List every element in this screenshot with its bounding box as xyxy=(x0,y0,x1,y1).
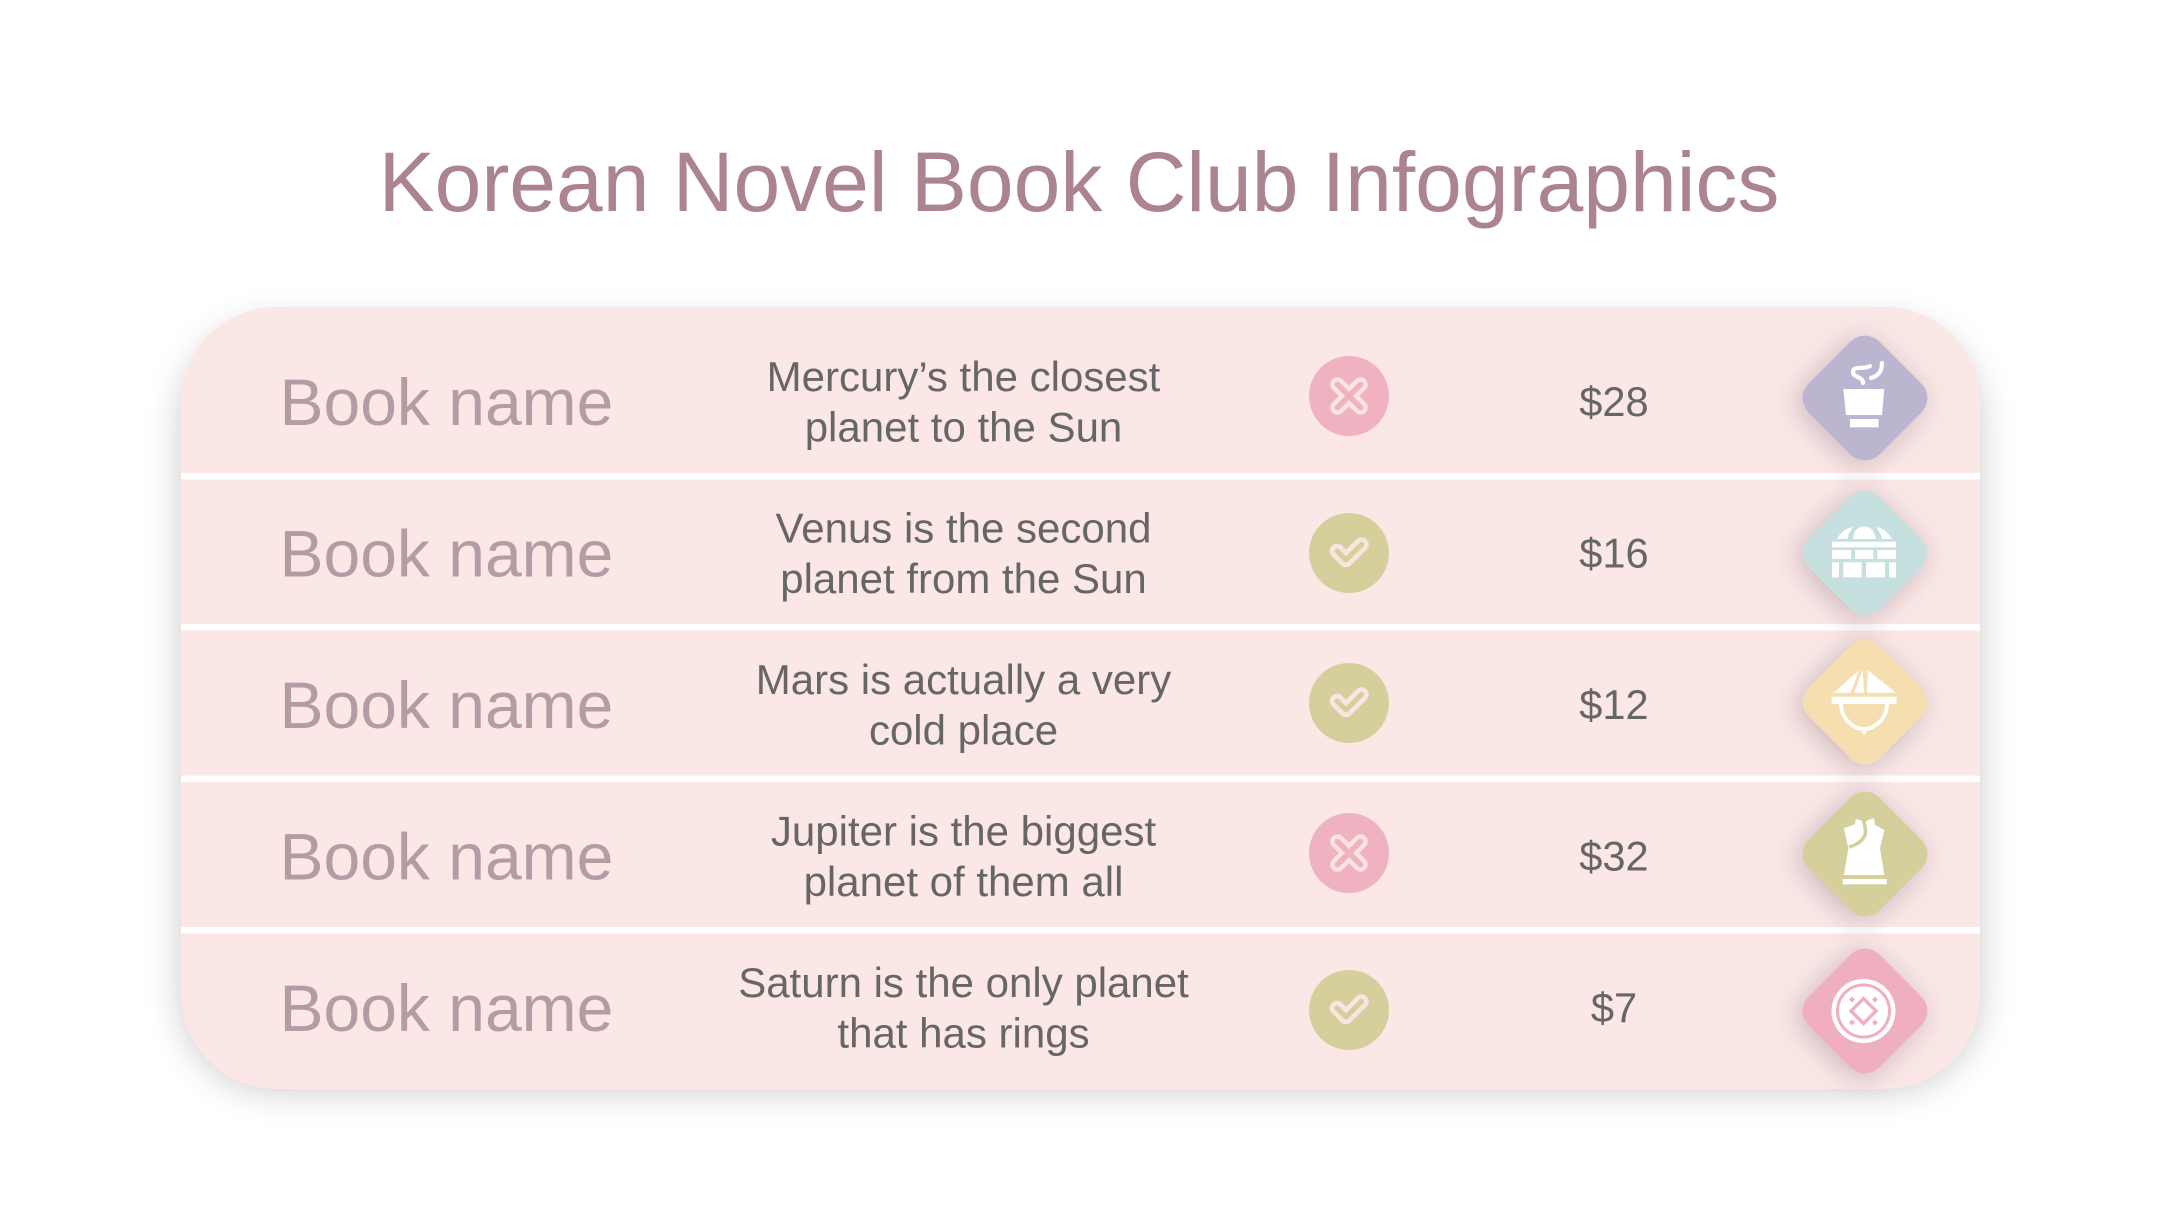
price 4: $32 xyxy=(1579,832,1649,880)
row 2: Venus xyxy=(280,482,1936,628)
panel: book table background xyxy=(181,307,1980,1091)
icon: check status 5 xyxy=(1309,970,1389,1050)
title: Korean Novel Book Club Infographics xyxy=(379,135,1779,229)
icon: tea cup diamond xyxy=(1790,327,1936,473)
price 1: $28 xyxy=(1579,378,1649,425)
row 5: Saturn xyxy=(280,940,1936,1086)
icon: check status 2 xyxy=(1309,513,1389,593)
description 3: Mars is actually a very xyxy=(756,656,1171,703)
price 5: $7 xyxy=(1591,984,1637,1031)
description 1: Mercury’s the closest xyxy=(767,353,1161,400)
price 3: $12 xyxy=(1579,681,1649,728)
icon: traditional hat diamond xyxy=(1790,631,1936,777)
book name 4: Book name xyxy=(280,820,613,894)
icon: cross status 1 xyxy=(1309,356,1389,436)
icon: brick dome diamond xyxy=(1790,482,1936,628)
description 4: planet of them all xyxy=(804,858,1123,905)
icon: coin diamond xyxy=(1790,940,1936,1086)
description 1: planet to the Sun xyxy=(805,404,1122,450)
row 1: Mercury xyxy=(280,327,1936,473)
icon: check status 3 xyxy=(1309,663,1389,743)
description 5: Saturn is the only planet xyxy=(738,959,1189,1006)
row 4: Jupiter xyxy=(280,783,1936,929)
book name 1: Book name xyxy=(280,365,613,439)
description 2: planet from the Sun xyxy=(780,555,1147,602)
description 3: cold place xyxy=(869,706,1058,754)
price 2: $16 xyxy=(1579,530,1649,576)
icon: hanbok dress diamond xyxy=(1790,783,1936,929)
book name 2: Book name xyxy=(280,516,613,590)
book name 5: Book name xyxy=(280,971,613,1045)
description 2: Venus is the second xyxy=(776,505,1151,552)
description 4: Jupiter is the biggest xyxy=(771,808,1156,854)
description 5: that has rings xyxy=(837,1010,1090,1056)
book name 3: Book name xyxy=(280,668,613,742)
icon: cross status 4 xyxy=(1309,813,1389,893)
row 3: Mars xyxy=(280,631,1936,777)
